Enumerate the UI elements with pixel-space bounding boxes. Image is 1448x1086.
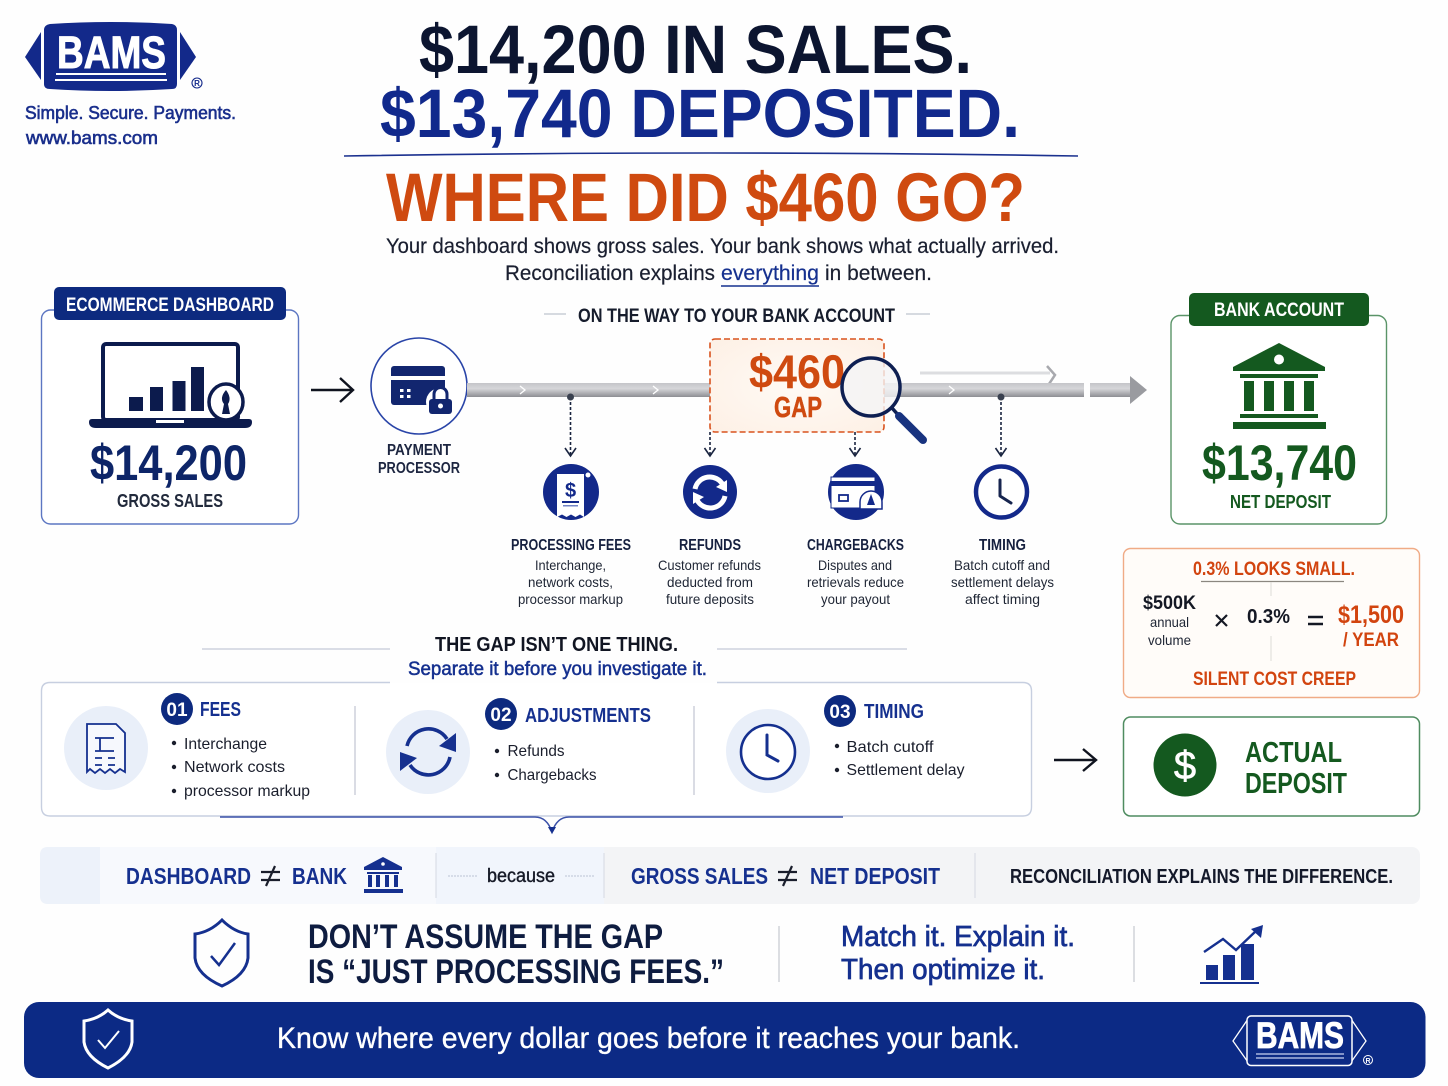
warning headline: IS “JUST PROCESSING FEES.” bbox=[308, 953, 724, 991]
logo: BAMS bbox=[25, 22, 202, 91]
warning headline bbox=[308, 918, 724, 991]
icon: chargebacks bbox=[828, 464, 884, 520]
category: adjustments: Chargebacks bbox=[508, 767, 596, 784]
category: adjustments: 02 bbox=[490, 705, 512, 726]
icon: processing fees: $ bbox=[565, 480, 576, 502]
text block: processing fees: PROCESSING FEES bbox=[511, 537, 631, 554]
footer message: Know where every dollar goes before it reaches your bank. bbox=[277, 1022, 1020, 1055]
heading tab: bank account: BANK ACCOUNT bbox=[1214, 300, 1344, 321]
panel: ecommerce dashboard bbox=[42, 287, 298, 524]
text block: refunds: REFUNDS bbox=[679, 537, 741, 554]
formula: multiply rate: 0.3% bbox=[1247, 606, 1290, 628]
text block: processing fees: processor markup bbox=[518, 591, 623, 607]
logo tagline: www.bams.com bbox=[25, 128, 158, 148]
formula: annual volume bbox=[1143, 593, 1196, 648]
category: adjustments bbox=[386, 698, 651, 794]
icon: growth chart bbox=[1200, 925, 1263, 984]
heading tab: bank account bbox=[1189, 293, 1369, 326]
title: $13,740 DEPOSITED. bbox=[380, 75, 1020, 152]
subtitle bbox=[386, 235, 1059, 286]
footer banner bbox=[24, 1002, 1426, 1078]
text block: chargebacks: Disputes and bbox=[818, 557, 892, 573]
logo tagline bbox=[25, 103, 236, 148]
flow pipe arrow bbox=[467, 366, 1147, 404]
logo: BAMS: BAMS bbox=[57, 27, 166, 78]
category: fees bbox=[64, 693, 310, 800]
connector arrows to causes bbox=[565, 394, 1006, 456]
heading: the gap isn't one thing: THE GAP ISN’T ONE THING. bbox=[435, 634, 678, 656]
panel: bank account bbox=[1171, 293, 1386, 524]
icon: bank building bbox=[1233, 343, 1326, 429]
subtitle: everything bbox=[721, 262, 819, 285]
text block: processing fees: network costs, bbox=[528, 574, 613, 590]
category: timing: Settlement delay bbox=[846, 762, 964, 779]
logo: BAMS: R bbox=[194, 79, 200, 88]
figure: gross sales: $14,200 bbox=[90, 435, 247, 491]
heading tab: ecommerce dashboard bbox=[54, 287, 286, 320]
label: gross sales: GROSS SALES bbox=[117, 491, 223, 511]
subtitle: Reconciliation explains bbox=[505, 262, 715, 285]
category: fees: processor markup bbox=[184, 783, 310, 800]
panel: actual deposit: ACTUAL bbox=[1245, 737, 1342, 769]
icon: timing clock bbox=[976, 466, 1027, 518]
label: payment processor: PAYMENT bbox=[387, 442, 451, 459]
category: adjustments: Refunds bbox=[508, 743, 564, 760]
subtitle: in between. bbox=[825, 262, 932, 285]
category: fees: Interchange bbox=[184, 736, 267, 753]
icon: small bank bbox=[364, 857, 403, 893]
callout: $460 gap: GAP bbox=[774, 392, 822, 424]
equation: gross sales not equal net deposit: GROSS SALES bbox=[631, 863, 768, 889]
heading: on the way to your bank account: ON THE WAY TO YOUR BANK ACCOUNT bbox=[578, 306, 895, 327]
icon: processing fees bbox=[543, 464, 599, 520]
subtitle: Your dashboard shows gross sales. Your bank shows what actually arrived. bbox=[386, 235, 1059, 258]
category: timing: TIMING bbox=[864, 701, 924, 723]
title bbox=[344, 11, 1078, 236]
arrow: dashboard to processor bbox=[311, 378, 353, 402]
formula: result: / YEAR bbox=[1343, 630, 1399, 651]
summary band bbox=[40, 847, 1420, 904]
category: adjustments: ADJUSTMENTS bbox=[525, 705, 651, 727]
formula: result: $1,500 bbox=[1338, 601, 1404, 629]
formula: annual volume: $500K bbox=[1143, 593, 1196, 614]
text block: timing: TIMING bbox=[979, 537, 1026, 554]
icon: refunds bbox=[683, 465, 737, 519]
action text: Then optimize it. bbox=[841, 954, 1045, 986]
text block: refunds: future deposits bbox=[666, 591, 754, 607]
equation: dashboard not equal bank: BANK bbox=[292, 863, 347, 889]
equation: dashboard not equal bank bbox=[126, 857, 403, 893]
text block: timing: settlement delays bbox=[951, 574, 1054, 590]
icon: shield check bbox=[195, 920, 248, 986]
title: $14,200 IN SALES. bbox=[419, 11, 972, 88]
text block: chargebacks: your payout bbox=[821, 591, 890, 607]
icon: payment processor bbox=[371, 338, 467, 434]
formula: annual volume: volume bbox=[1148, 632, 1191, 648]
logo: BAMS white outline: BAMS bbox=[1256, 1015, 1344, 1056]
panel: silent cost creep: 0.3% LOOKS SMALL. bbox=[1193, 559, 1355, 580]
text block: refunds bbox=[658, 537, 761, 607]
label: net deposit: NET DEPOSIT bbox=[1230, 492, 1331, 512]
callout: $460 gap: $460 bbox=[749, 345, 845, 398]
text block: timing: affect timing bbox=[965, 591, 1040, 607]
category: fees: 01 bbox=[166, 700, 188, 721]
text block: refunds: Customer refunds bbox=[658, 557, 761, 573]
equation: gross sales not equal net deposit bbox=[631, 863, 940, 889]
formula: result bbox=[1338, 601, 1404, 651]
panel: actual deposit bbox=[1124, 717, 1420, 816]
panel: actual deposit: $ bbox=[1174, 744, 1196, 788]
icon: laptop with rising bars bbox=[89, 344, 252, 428]
heading tab: ecommerce dashboard: ECOMMERCE DASHBOARD bbox=[66, 295, 274, 316]
icon: white shield check bbox=[84, 1010, 132, 1068]
heading: the gap isn't one thing bbox=[202, 634, 907, 680]
logo: BAMS white outline: R bbox=[1365, 1058, 1371, 1065]
panel: silent cost creep bbox=[1124, 548, 1420, 698]
category: timing bbox=[726, 695, 964, 793]
figure: net deposit: $13,740 bbox=[1202, 435, 1357, 491]
text block: chargebacks bbox=[807, 537, 904, 607]
label: payment processor bbox=[378, 442, 460, 477]
panel: three gap categories bbox=[42, 682, 1032, 834]
action text: Match it. Explain it. bbox=[841, 921, 1075, 953]
icon: magnifying glass bbox=[842, 358, 923, 440]
text block: chargebacks: retrievals reduce bbox=[807, 574, 904, 590]
callout: $460 gap bbox=[710, 339, 884, 432]
connector: because: because bbox=[487, 866, 555, 887]
warning headline: DON’T ASSUME THE GAP bbox=[308, 918, 663, 956]
panel: silent cost creep: SILENT COST CREEP bbox=[1193, 669, 1356, 690]
text block: processing fees bbox=[511, 537, 631, 607]
equation: gross sales not equal net deposit: NET DEPOSIT bbox=[810, 863, 940, 889]
action text bbox=[841, 921, 1075, 986]
text block: processing fees: Interchange, bbox=[535, 557, 606, 573]
category: fees: FEES bbox=[200, 699, 241, 721]
text block: chargebacks: CHARGEBACKS bbox=[807, 537, 904, 554]
category: timing: Batch cutoff bbox=[846, 739, 934, 756]
logo: BAMS white outline bbox=[1233, 1015, 1372, 1066]
arrow: categories to actual deposit bbox=[1054, 749, 1096, 771]
text block: timing: Batch cutoff and bbox=[954, 557, 1050, 573]
category: fees: Network costs bbox=[184, 759, 285, 776]
formula: annual volume: annual bbox=[1150, 614, 1189, 630]
text block: timing bbox=[951, 537, 1054, 607]
panel: actual deposit: DEPOSIT bbox=[1245, 768, 1347, 800]
category: timing: 03 bbox=[829, 702, 851, 723]
label: payment processor: PROCESSOR bbox=[378, 460, 460, 477]
equation: dashboard not equal bank: DASHBOARD bbox=[126, 863, 251, 889]
heading: the gap isn't one thing: Separate it before you investigate it. bbox=[408, 659, 707, 680]
text block: refunds: deducted from bbox=[667, 574, 753, 590]
logo tagline: Simple. Secure. Payments. bbox=[25, 103, 236, 123]
formula: multiply rate bbox=[1216, 606, 1323, 628]
title: WHERE DID $460 GO? bbox=[386, 159, 1025, 236]
